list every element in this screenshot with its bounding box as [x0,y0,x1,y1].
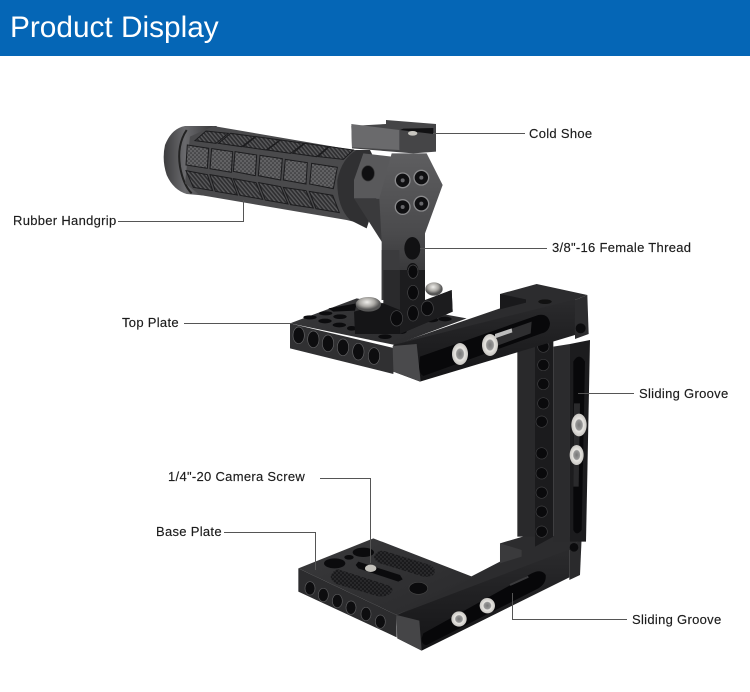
header banner [0,0,750,56]
label: lower sliding groove: Sliding Groove [632,612,721,627]
label: camera screw: 1/4"-20 Camera Screw [168,469,305,484]
grip middle row [186,145,337,189]
side hole [362,166,374,181]
arm top surface [393,284,587,345]
leader: top plate [184,322,292,324]
icon: stem lower part [356,265,453,334]
handle grip body [185,126,363,224]
front holes [305,582,385,628]
knurled pads [331,569,392,596]
label: rubber handgrip: Rubber Handgrip [13,213,117,228]
label: cold shoe: Cold Shoe [529,126,592,141]
column slot [573,357,585,533]
handle end cap [164,126,217,197]
grip lower row [186,171,339,213]
leader: lower sliding groove [512,593,627,620]
base plate front [298,568,397,637]
top plate top surface [290,298,467,345]
arm front face [393,299,575,382]
icon: vertical column [517,338,590,547]
column holes [536,341,549,537]
arm top surface [397,535,582,617]
arm front face [397,549,569,651]
threaded holes [404,237,420,299]
top arm screws [452,343,468,365]
leader: rubber handgrip [118,200,244,222]
stem left face [382,250,399,300]
leader: cold shoe [433,132,525,134]
leader: base plate [224,532,316,570]
title: Product Display [10,11,219,44]
leader: female thread [420,248,547,250]
four hex screws [395,170,429,214]
handle collar [337,150,383,228]
grip top row [195,131,353,159]
handle foot block [354,290,453,334]
icon: bottom arm and base plate [298,535,582,651]
right cap [575,295,589,339]
column screws [571,414,587,436]
label: top plate: Top Plate [122,315,179,330]
right cap [569,537,582,580]
cold shoe [351,120,436,153]
top plate holes [293,327,380,364]
label: upper sliding groove: Sliding Groove [639,386,728,401]
label: female thread: 3/8"-16 Female Thread [552,240,691,255]
hex head plate face [379,153,443,300]
leader: camera screw [320,478,370,563]
hex head plate side [354,153,392,198]
icon: rubber handle [164,120,443,300]
top plate front [290,323,395,374]
icon: top plate and top arm [290,284,589,382]
base plate top [298,538,474,615]
bottom arm screws [451,611,467,627]
base plate slots and holes [356,562,403,582]
leader: upper sliding groove [578,392,634,394]
label: base plate: Base Plate [156,524,222,539]
